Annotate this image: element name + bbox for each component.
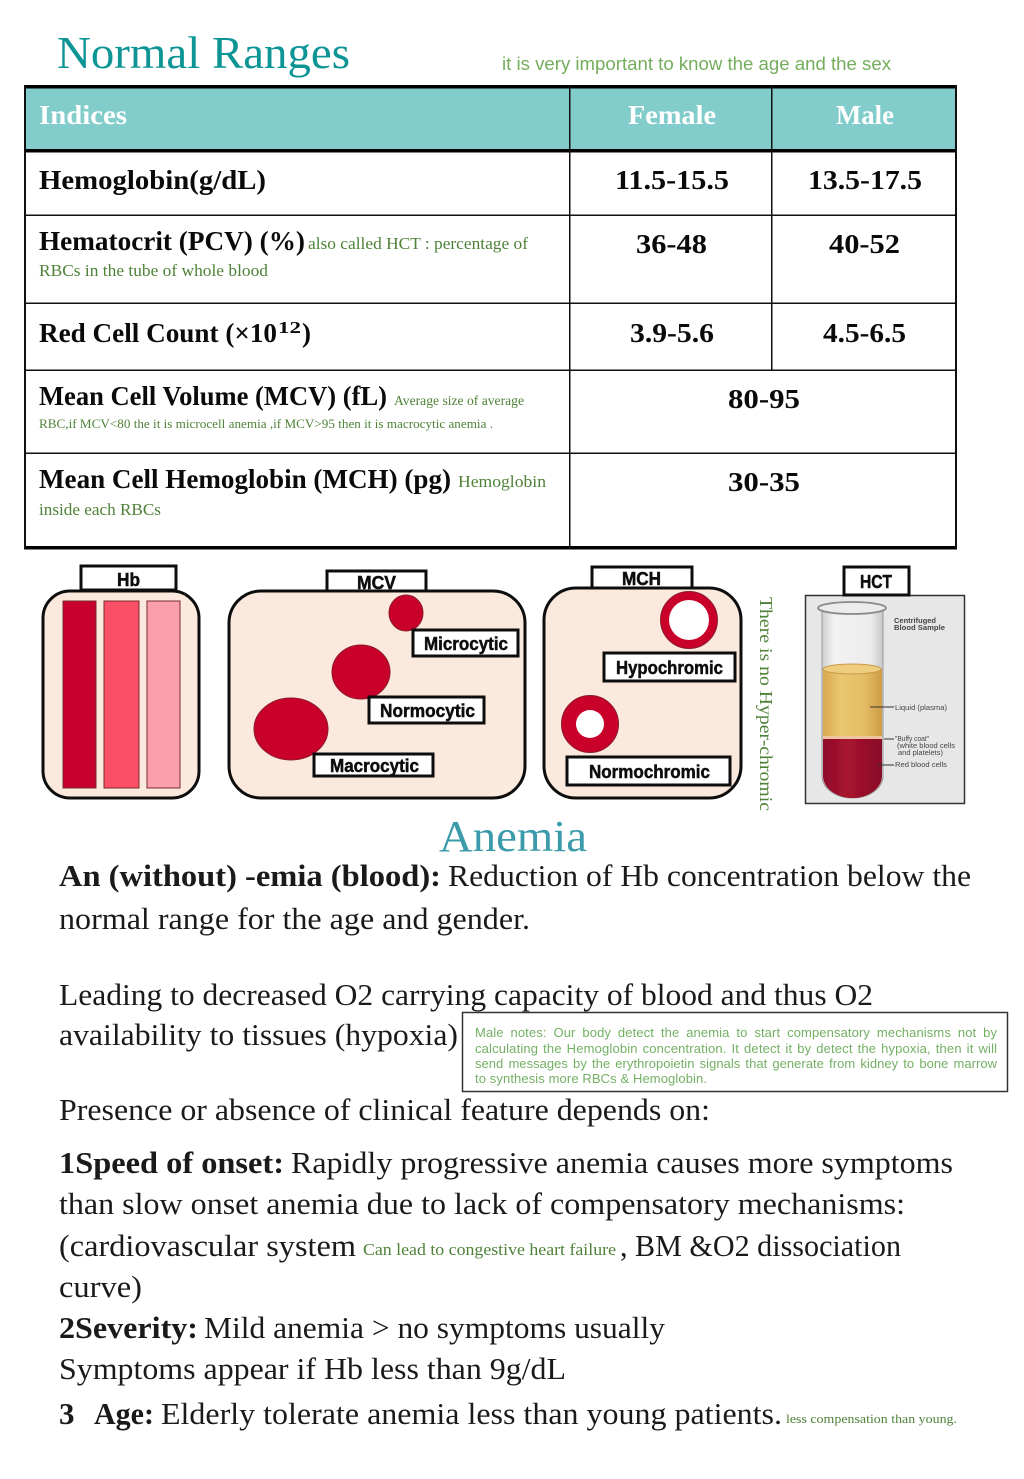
table header band bbox=[25, 87, 956, 150]
row: Hemoglobin: Hemoglobin(g/dL) bbox=[39, 165, 266, 195]
callout: male notes: Male notes: Our body detect the anemia to start compensatory mechanisms not by bbox=[475, 1025, 998, 1040]
item 1: speed of onset: curve) bbox=[59, 1269, 142, 1304]
row: Hematocrit bbox=[39, 226, 900, 280]
paragraph: hypoxia: Leading to decreased O2 carrying capacity of blood and thus O2 bbox=[59, 977, 873, 1012]
row: Red Cell Count: ) bbox=[302, 318, 311, 348]
item 1: speed of onset: Can lead to congestive heart failure bbox=[363, 1240, 616, 1259]
paragraph: definition: Reduction of Hb concentration below the bbox=[448, 858, 971, 893]
diagram: HCT centrifuged blood sample: HCT bbox=[860, 572, 892, 592]
item 1: speed of onset bbox=[59, 1145, 953, 1304]
callout: male notes: to synthesis more RBCs & Hemoglobin. bbox=[475, 1071, 707, 1086]
diagram: MCV panel: Microcytic bbox=[424, 634, 508, 654]
diagram: MCH panel: MCH bbox=[622, 569, 661, 589]
paragraph: definition: An (without) -emia (blood): bbox=[59, 858, 441, 893]
diagram: MCV panel: Normocytic bbox=[380, 701, 475, 721]
row: Red Cell Count: Red Cell Count (×10 bbox=[39, 318, 277, 348]
row: Mean Cell Volume: 80-95 bbox=[728, 384, 800, 414]
header: Indices: Indices bbox=[39, 100, 127, 130]
diagram: MCH panel bbox=[544, 567, 741, 798]
row: Mean Cell Hemoglobin bbox=[39, 464, 800, 519]
tube labels: (white blood cells bbox=[897, 743, 956, 750]
item 1: speed of onset: 1Speed of onset: bbox=[59, 1145, 284, 1180]
tube labels: "Buffy coat" bbox=[895, 736, 929, 743]
row: Mean Cell Volume: RBC,if MCV<80 the it is microcell anemia ,if MCV>95 then it is macrocytic anemia . bbox=[39, 416, 493, 431]
item 3: age: less compensation than young. bbox=[786, 1411, 957, 1426]
paragraph: definition bbox=[59, 858, 971, 936]
row: Hemoglobin bbox=[39, 165, 922, 195]
diagram: MCH panel: Normochromic bbox=[589, 762, 710, 782]
diagram: HCT centrifuged blood sample bbox=[806, 567, 964, 804]
tube labels: Red blood cells bbox=[895, 762, 948, 769]
table: normal ranges bbox=[24, 85, 957, 550]
diagram: MCH panel: Hypochromic bbox=[616, 658, 723, 678]
item 2: severity bbox=[59, 1310, 666, 1386]
row: Red Cell Count bbox=[39, 318, 906, 348]
callout: male notes: calculating the Hemoglobin concentration. It detect it by detect the hypoxia, then it will bbox=[475, 1041, 997, 1056]
row: Mean Cell Hemoglobin: Hemoglobin bbox=[458, 472, 547, 491]
tube labels: Blood Sample bbox=[894, 625, 945, 632]
diagram: MCV panel bbox=[229, 571, 525, 798]
item 2: severity: 2Severity: bbox=[59, 1310, 198, 1345]
row: Mean Cell Volume: Average size of average bbox=[394, 393, 524, 408]
row: Red Cell Count: 4.5-6.5 bbox=[823, 318, 906, 348]
item 1: speed of onset: (cardiovascular system bbox=[59, 1228, 356, 1263]
item 1: speed of onset: than slow onset anemia due to lack of compensatory mechanisms: bbox=[59, 1186, 905, 1221]
item 2: severity: Mild anemia > no symptoms usually bbox=[204, 1310, 666, 1345]
row: Mean Cell Volume bbox=[39, 381, 800, 431]
header: Male: Male bbox=[836, 100, 894, 130]
callout: male notes bbox=[462, 1012, 1008, 1092]
tube labels: and platelets) bbox=[898, 750, 943, 757]
tube labels: Centrifuged bbox=[894, 618, 936, 625]
diagram: MCV panel: Macrocytic bbox=[330, 756, 419, 776]
diagram: MCV panel: MCV bbox=[357, 573, 396, 593]
item 3: age: 3 bbox=[59, 1396, 74, 1431]
subtitle note: it is very important to know the age and the sex bbox=[502, 54, 891, 74]
heading: Anemia: Anemia bbox=[439, 812, 587, 861]
item 2: severity: Symptoms appear if Hb less than 9g/dL bbox=[59, 1351, 566, 1386]
row: Hematocrit: also called HCT : percentage of bbox=[308, 234, 528, 253]
title: Normal Ranges: Normal Ranges bbox=[57, 27, 350, 78]
tube labels bbox=[870, 618, 956, 769]
paragraph: definition: normal range for the age and gender. bbox=[59, 901, 530, 936]
text: clinical feature intro: Presence or absence of clinical feature depends on: bbox=[59, 1092, 710, 1127]
row: Mean Cell Hemoglobin: inside each RBCs bbox=[39, 500, 161, 519]
item 1: speed of onset: Rapidly progressive anemia causes more symptoms bbox=[291, 1145, 953, 1180]
diagram: Hb panel bbox=[43, 566, 199, 798]
tube labels: Liquid (plasma) bbox=[895, 705, 947, 712]
item 3: age: Age: bbox=[94, 1396, 154, 1431]
row: Hemoglobin: 11.5-15.5 bbox=[615, 165, 729, 195]
row: Mean Cell Hemoglobin: 30-35 bbox=[728, 467, 800, 497]
row: Mean Cell Volume: Mean Cell Volume (MCV) (fL) bbox=[39, 381, 387, 411]
diagram: Hb panel: Hb bbox=[117, 570, 140, 590]
row: Hematocrit: Hematocrit (PCV) (%) bbox=[39, 226, 305, 256]
row: Hematocrit: RBCs in the tube of whole blood bbox=[39, 261, 269, 280]
row: Hematocrit: 40-52 bbox=[829, 229, 900, 259]
item 3: age bbox=[59, 1396, 957, 1431]
row: Mean Cell Hemoglobin: Mean Cell Hemoglobin (MCH) (pg) bbox=[39, 464, 451, 494]
test tube bbox=[818, 602, 886, 798]
row: Hemoglobin: 13.5-17.5 bbox=[808, 165, 922, 195]
callout: male notes: send messages by the erythropoietin signals that generate from kidney to bone marrow bbox=[475, 1056, 998, 1071]
paragraph: hypoxia: availability to tissues (hypoxia) bbox=[59, 1017, 458, 1052]
row: Red Cell Count: 3.9-5.6 bbox=[630, 318, 714, 348]
header: Female: Female bbox=[628, 100, 716, 130]
paragraph: hypoxia bbox=[59, 977, 873, 1052]
item 1: speed of onset: , BM &O2 dissociation bbox=[620, 1228, 901, 1263]
row: Hematocrit: 36-48 bbox=[636, 229, 707, 259]
item 3: age: Elderly tolerate anemia less than young patients. bbox=[161, 1396, 782, 1431]
vertical note: There is no Hyper-chromic: There is no Hyper-chromic bbox=[756, 597, 776, 811]
row: Red Cell Count: 12 bbox=[278, 318, 301, 337]
